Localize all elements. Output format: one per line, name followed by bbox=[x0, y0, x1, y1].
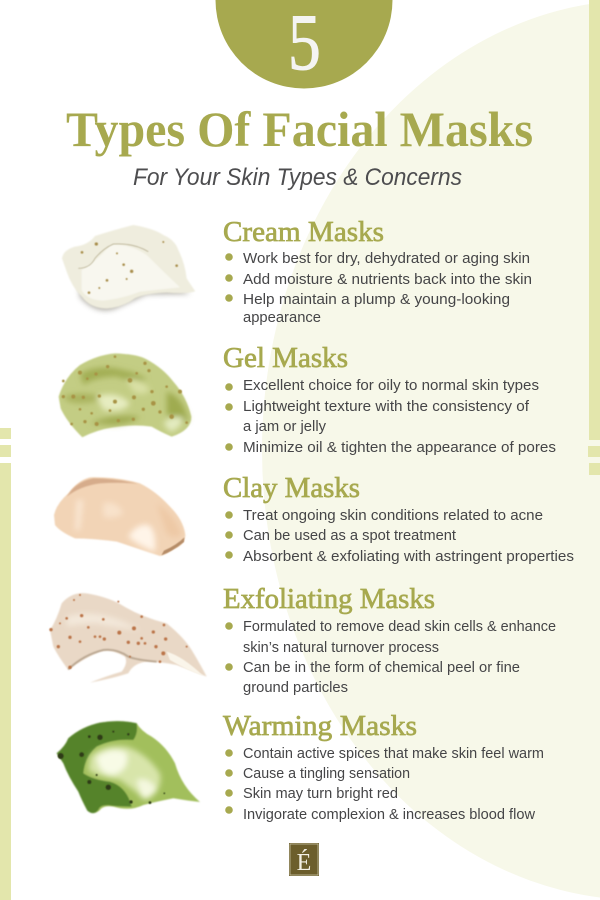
panel: clay masks bbox=[54, 472, 574, 565]
heading: clay masks: Clay Masks bbox=[223, 472, 360, 504]
panel: warming masks bbox=[57, 710, 544, 823]
panel: exfoliating masks bbox=[49, 583, 556, 696]
bullet list: warming masks: Contain active spices that make skin feel warm bbox=[243, 746, 544, 762]
panel: cream masks bbox=[62, 216, 532, 326]
bullet list: gel masks: Minimize oil & tighten the appearance of pores bbox=[243, 440, 556, 456]
icon: exfoliating mask swatch bbox=[49, 593, 207, 683]
logo: É bbox=[297, 850, 311, 876]
bullet list: clay masks: Treat ongoing skin conditions related to acne bbox=[243, 508, 543, 524]
bullet list: warming masks: Invigorate complexion & increases blood flow bbox=[243, 807, 536, 823]
large pale background ellipse bbox=[262, 0, 600, 900]
left decorative stripe bbox=[0, 428, 11, 900]
bullet list: warming masks: Cause a tingling sensation bbox=[243, 766, 410, 782]
bullet list: exfoliating masks: ground particles bbox=[243, 680, 348, 696]
icon: warming mask swatch bbox=[57, 721, 200, 813]
bullet list: gel masks: Lightweight texture with the consistency of bbox=[243, 399, 530, 415]
bullet list: exfoliating masks: Formulated to remove dead skin cells & enhance bbox=[243, 619, 556, 635]
bullet list: warming masks: Skin may turn bright red bbox=[243, 786, 398, 802]
number badge bbox=[216, 0, 392, 88]
subtitle: For Your Skin Types & Concerns bbox=[133, 164, 462, 191]
icon: clay mask swatch bbox=[54, 477, 185, 556]
bullet list: cream masks bbox=[225, 251, 532, 326]
bullet list: exfoliating masks bbox=[225, 619, 556, 696]
bullet list: clay masks: Can be used as a spot treatment bbox=[243, 528, 456, 544]
icon: gel mask swatch bbox=[59, 353, 191, 437]
bullet list: warming masks bbox=[225, 746, 544, 823]
heading: cream masks: Cream Masks bbox=[223, 216, 384, 248]
right decorative stripe bbox=[588, 0, 600, 475]
heading: warming masks: Warming Masks bbox=[223, 710, 417, 742]
heading: exfoliating masks: Exfoliating Masks bbox=[223, 583, 435, 615]
bullet list: clay masks: Absorbent & exfoliating with astringent properties bbox=[243, 549, 574, 565]
bullet list: gel masks bbox=[225, 378, 556, 456]
number badge: 5 bbox=[288, 0, 321, 86]
logo bbox=[289, 843, 319, 876]
title: Types Of Facial Masks bbox=[66, 101, 533, 157]
bullet list: gel masks: a jam or jelly bbox=[243, 419, 327, 435]
panel: gel masks bbox=[59, 342, 556, 456]
bullet list: gel masks: Excellent choice for oily to normal skin types bbox=[243, 378, 539, 394]
bullet list: clay masks bbox=[225, 508, 574, 565]
bullet list: cream masks: Help maintain a plump & young-looking bbox=[243, 292, 510, 308]
bullet list: cream masks: Work best for dry, dehydrated or aging skin bbox=[243, 251, 530, 267]
bullet list: cream masks: Add moisture & nutrients back into the skin bbox=[243, 272, 532, 288]
bullet list: cream masks: appearance bbox=[243, 310, 321, 326]
bullet list: exfoliating masks: skin’s natural turnover process bbox=[243, 640, 439, 656]
bullet list: exfoliating masks: Can be in the form of chemical peel or fine bbox=[243, 660, 520, 676]
heading: gel masks: Gel Masks bbox=[223, 342, 348, 374]
icon: cream mask swatch bbox=[62, 225, 195, 310]
